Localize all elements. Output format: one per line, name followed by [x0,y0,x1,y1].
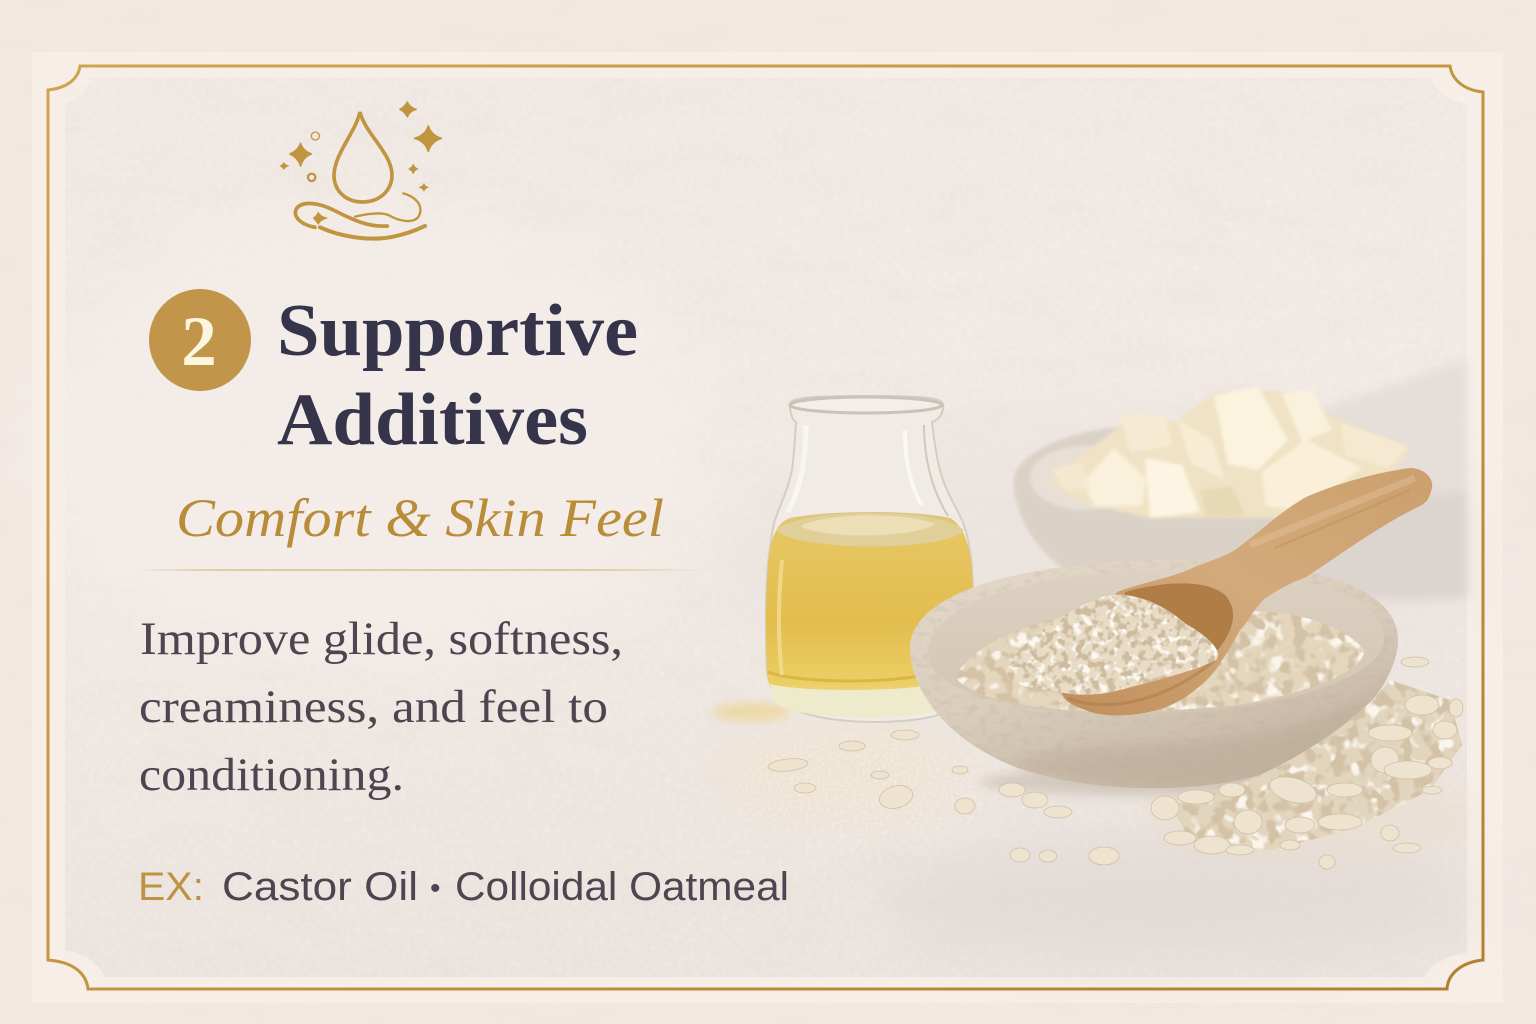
divider [135,569,705,571]
icon: cupped hand [295,193,425,239]
heading: Supportive [277,290,638,372]
soft shadow under front bowl [980,768,1300,796]
back bowl [1014,428,1300,590]
glass bottle [766,396,975,722]
oat pile and scattered flakes [767,657,1463,869]
number badge: 2 [181,303,217,381]
body text [139,613,623,801]
subheading: Comfort & Skin Feel [176,488,664,548]
oats spread across the bowl [955,611,1364,712]
body text: conditioning. [139,749,404,801]
body text: creaminess, and feel to [139,681,608,733]
examples line: Colloidal Oatmeal [455,865,789,909]
blurred powder and oil glow on the table [712,703,1470,865]
number badge [149,289,251,391]
front stone bowl [910,560,1398,788]
icon: oil drop over hand with sparkles [280,102,441,239]
heading: Additives [277,379,588,461]
towel behind the back bowl [1240,360,1467,600]
body text: Improve glide, softness, [140,613,623,665]
icon: sparkles [280,102,441,191]
oat mound in spoon [1006,595,1218,695]
examples line: • [430,872,441,905]
photo: oil bottle, bowls, spoon and oats [712,360,1470,869]
examples line: EX: [138,865,204,909]
icon: drop [334,112,392,202]
examples line: Castor Oil [222,865,418,909]
examples line [138,865,789,909]
butter chunks [1050,386,1412,518]
heading [277,290,638,461]
wooden spoon [1062,468,1432,715]
